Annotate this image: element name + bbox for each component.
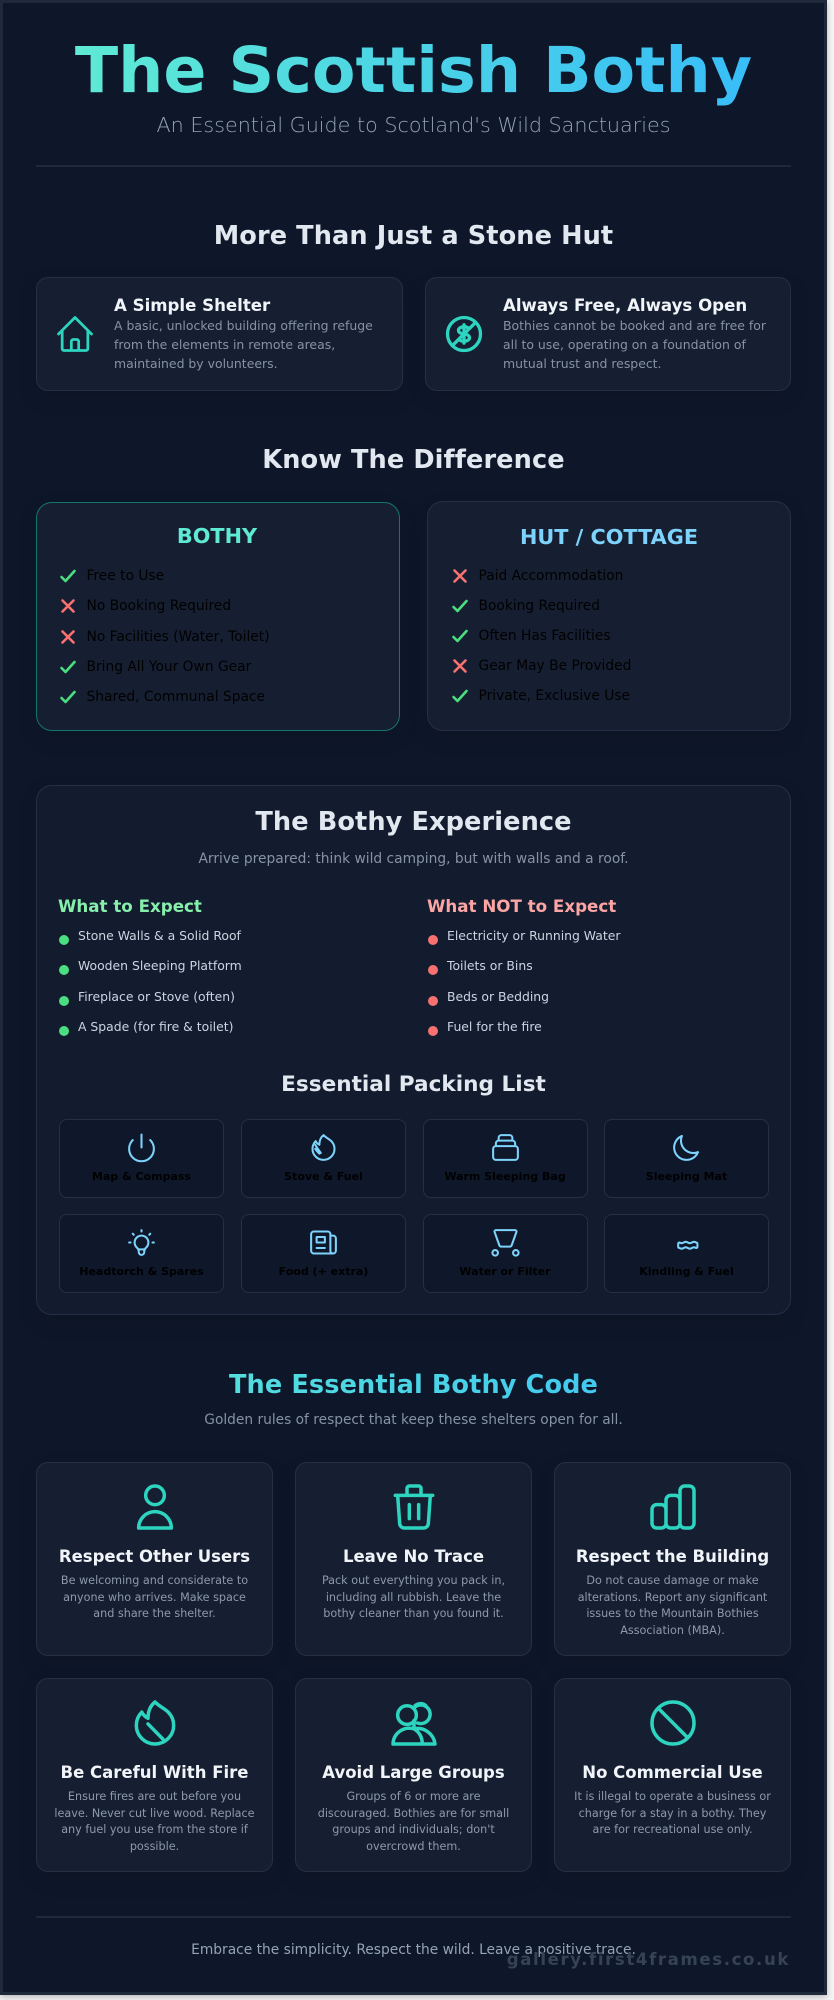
heading: the essential bothy code: The Essential Bothy Code	[229, 1370, 598, 1400]
rule: leave no trace: bothy cleaner than you found it.	[323, 1607, 504, 1620]
rule: be careful with fire: leave. Never cut live wood. Replace	[54, 1806, 255, 1820]
card text: Bothies cannot be booked and are free for	[503, 318, 766, 333]
icon: ban	[650, 1700, 696, 1746]
item: water or filter	[422, 1214, 588, 1293]
rule: leave no trace: including all rubbish. Leave the	[326, 1590, 501, 1604]
rule: no commercial use: charge for a stay in a bothy. They	[579, 1806, 766, 1820]
rule: respect the building: alterations. Report any significant	[578, 1590, 767, 1604]
card text: A basic, unlocked building offering refuge	[114, 318, 373, 333]
bothy heading: BOTHY	[177, 524, 257, 548]
heading: more than just a stone hut: More Than Just a Stone Hut	[214, 221, 613, 251]
rule: no commercial use	[554, 1678, 791, 1872]
list: what to expect: Wooden Sleeping Platform	[78, 958, 242, 973]
list: hut features: Paid Accommodation	[478, 568, 623, 584]
heading: essential packing list: Essential Packing List	[281, 1072, 546, 1097]
card heading: A Simple Shelter	[114, 296, 270, 315]
list: hut features	[452, 568, 631, 704]
item: stove and fuel: Stove & Fuel	[284, 1170, 363, 1183]
watermark: gallery.first4frames.co.uk	[507, 1950, 790, 1969]
icon: bars	[650, 1484, 696, 1530]
item: warm sleeping bag	[422, 1119, 588, 1198]
item: warm sleeping bag: Warm Sleeping Bag	[444, 1170, 566, 1183]
icon: flame	[312, 1134, 336, 1161]
rule: no commercial use: It is illegal to operate a business or	[574, 1790, 771, 1803]
rule: avoid large groups: Groups of 6 or more are	[346, 1790, 481, 1803]
item: kindling and fuel: Kindling & Fuel	[639, 1265, 734, 1278]
rule: leave no trace	[295, 1462, 532, 1656]
icon: person	[136, 1484, 174, 1530]
card text: from the elements in remote areas,	[114, 337, 335, 352]
header divider	[36, 165, 791, 167]
icon: stacked bag	[492, 1134, 519, 1161]
icon: power	[128, 1134, 155, 1162]
rule: respect the building: issues to the Mountain Bothies	[586, 1607, 759, 1620]
item: water or filter: Water or Filter	[459, 1265, 551, 1278]
list: what to expect: Fireplace or Stove (often)	[78, 989, 235, 1004]
card text: mutual trust and respect.	[503, 356, 662, 371]
icon: house	[57, 316, 93, 352]
list: bothy features: Shared, Communal Space	[86, 689, 265, 705]
list: hut features: Private, Exclusive Use	[478, 688, 630, 704]
list: what to expect: Stone Walls & a Solid Roof	[78, 928, 241, 943]
rule: respect the building: Association (MBA).	[620, 1624, 725, 1636]
card heading: Always Free, Always Open	[503, 296, 747, 315]
list: bothy features	[60, 568, 270, 705]
icon: newspaper	[310, 1230, 337, 1254]
rule: leave no trace: Leave No Trace	[343, 1547, 484, 1566]
item: stove and fuel	[241, 1119, 406, 1198]
subtitle: An Essential Guide to Scotland's Wild Sanctuaries	[156, 112, 670, 136]
item: sleeping mat	[604, 1119, 769, 1198]
item: headtorch and spares	[59, 1214, 224, 1293]
rule: respect other users: and share the shelter.	[93, 1607, 216, 1620]
rule: be careful with fire	[36, 1678, 273, 1872]
code subtitle: Golden rules of respect that keep these shelters open for all.	[204, 1412, 623, 1428]
list: hut features: Gear May Be Provided	[478, 658, 631, 674]
icon: filter cart	[491, 1229, 520, 1257]
panel: the bothy experience	[36, 785, 791, 1315]
icon: no dollar	[446, 316, 482, 352]
rule: be careful with fire: Ensure fires are out before you	[68, 1790, 241, 1803]
rule: no commercial use: No Commercial Use	[582, 1763, 763, 1782]
icon: light bulb	[128, 1229, 155, 1256]
list: what not to expect: Fuel for the fire	[447, 1019, 542, 1034]
item: food: Food (+ extra)	[279, 1265, 368, 1278]
icon: bin	[394, 1484, 434, 1530]
rule: avoid large groups: Avoid Large Groups	[322, 1763, 505, 1782]
footer divider	[36, 1916, 791, 1918]
item: sleeping mat: Sleeping Mat	[646, 1170, 727, 1183]
item: kindling and fuel	[604, 1214, 769, 1293]
rule: be careful with fire: Be Careful With Fire	[61, 1763, 248, 1782]
panel: a simple shelter	[36, 277, 403, 391]
list: what not to expect: Beds or Bedding	[447, 989, 549, 1004]
list: hut features: Booking Required	[478, 598, 600, 614]
icon: flame	[134, 1700, 176, 1746]
list: what to expect	[58, 896, 242, 1036]
experience heading: The Bothy Experience	[255, 807, 572, 837]
experience subtitle: Arrive prepared: think wild camping, but with walls and a roof.	[198, 851, 629, 867]
list: hut features: Often Has Facilities	[478, 628, 611, 644]
rule: respect the building: Do not cause damage or make	[586, 1574, 759, 1587]
card text	[114, 318, 373, 371]
icon: group	[391, 1702, 437, 1746]
icon: moon	[673, 1135, 699, 1161]
hut heading: HUT / COTTAGE	[520, 524, 698, 548]
rule: avoid large groups: discouraged. Bothies are for small	[318, 1806, 509, 1820]
rule: respect other users	[36, 1462, 273, 1656]
rule: respect the building: Respect the Building	[576, 1547, 769, 1566]
rule: avoid large groups: groups and individuals; don't	[332, 1823, 495, 1836]
list: what to expect: A Spade (for fire & toilet)	[78, 1019, 233, 1034]
rule: be careful with fire: any fuel you use from the store if	[61, 1823, 248, 1836]
list: bothy features: No Facilities (Water, Toilet)	[86, 629, 270, 645]
heading: what not to expect: What NOT to Expect	[427, 896, 616, 916]
panel: always free	[425, 277, 791, 391]
rule: respect the building	[554, 1462, 791, 1656]
list: what not to expect: Electricity or Running Water	[447, 928, 620, 943]
footer text: Embrace the simplicity. Respect the wild. Leave a positive trace.	[191, 1942, 636, 1958]
list: what not to expect: Toilets or Bins	[447, 958, 533, 973]
rule: avoid large groups: overcrowd them.	[366, 1840, 461, 1852]
title: The Scottish Bothy	[75, 33, 752, 107]
card text: all to use, operating on a foundation of	[503, 337, 746, 352]
item: food	[241, 1214, 406, 1293]
card text: maintained by volunteers.	[114, 356, 278, 371]
rule: respect other users: Be welcoming and considerate to	[61, 1574, 248, 1587]
list: what not to expect	[427, 896, 620, 1036]
rule: be careful with fire: possible.	[130, 1840, 179, 1852]
rule: respect other users: anyone who arrives. Make space	[63, 1590, 246, 1604]
heading: what to expect: What to Expect	[58, 896, 202, 916]
list: bothy features: Free to Use	[86, 568, 164, 584]
rule: respect other users: Respect Other Users	[59, 1547, 250, 1566]
panel: hut comparison	[427, 501, 791, 731]
list: bothy features: Bring All Your Own Gear	[86, 659, 251, 675]
icon: wavy bundle	[677, 1240, 698, 1250]
item: map and compass	[59, 1119, 224, 1198]
list: bothy features: No Booking Required	[86, 598, 231, 614]
heading: know the difference: Know The Difference	[262, 445, 565, 475]
item: map and compass: Map & Compass	[92, 1170, 191, 1183]
rule: avoid large groups	[295, 1678, 532, 1872]
panel: bothy comparison	[36, 502, 400, 731]
heading: the essential bothy code	[3, 1368, 824, 1402]
rule: no commercial use: are for recreational use only.	[592, 1823, 752, 1836]
card text	[503, 318, 766, 371]
item: headtorch and spares: Headtorch & Spares	[79, 1265, 204, 1278]
rule: leave no trace: Pack out everything you pack in,	[322, 1574, 505, 1587]
